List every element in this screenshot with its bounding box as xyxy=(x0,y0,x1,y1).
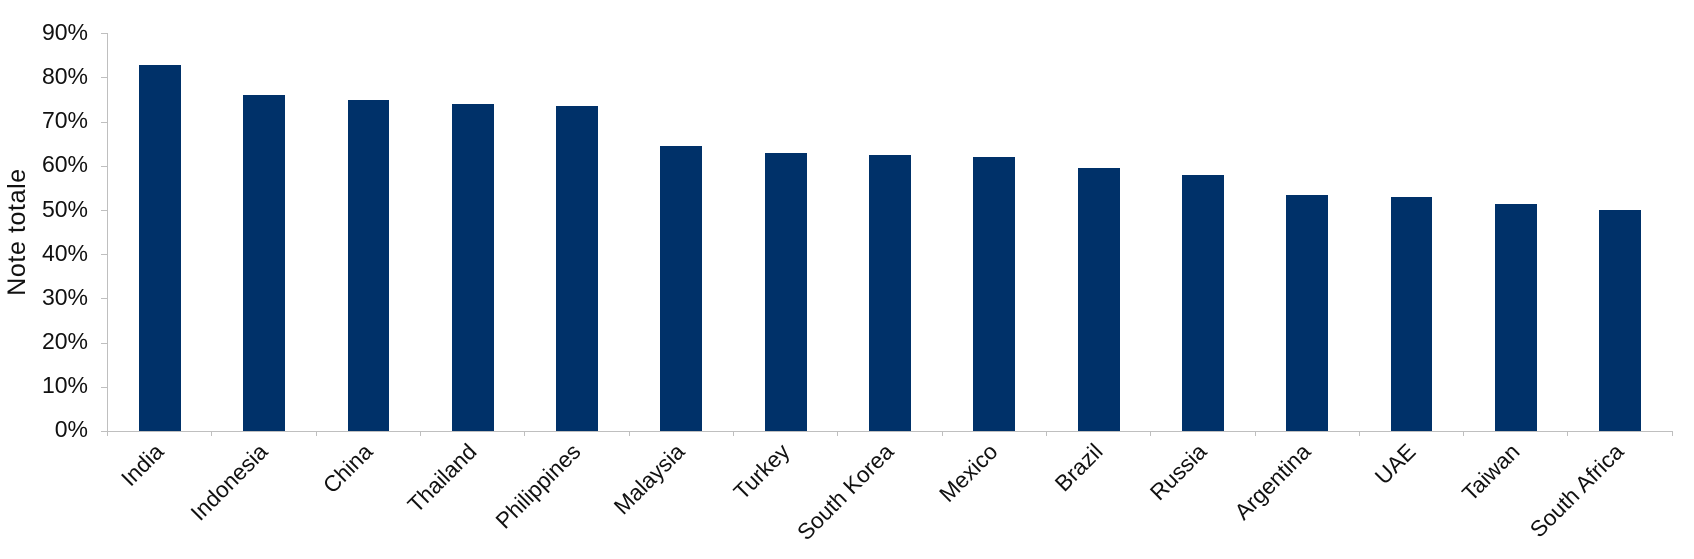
x axis country labels: South Africa xyxy=(1525,439,1629,542)
x axis country labels: UAE xyxy=(1370,439,1421,489)
y axis labels: 70% xyxy=(42,107,88,133)
y axis labels xyxy=(42,19,88,442)
x axis country labels: Brazil xyxy=(1050,439,1108,496)
y axis labels: 50% xyxy=(42,196,88,222)
x axis country labels: China xyxy=(318,439,378,498)
x axis country labels xyxy=(116,438,1629,545)
y axis labels: 10% xyxy=(42,372,88,398)
x axis country labels: Russia xyxy=(1145,439,1212,505)
x axis country labels: India xyxy=(116,439,169,491)
x axis country labels: Indonesia xyxy=(186,439,273,526)
y axis labels: 90% xyxy=(42,19,88,45)
x axis country labels: Argentina xyxy=(1230,439,1316,525)
y axis title: Note totale xyxy=(3,168,31,296)
x axis country labels: South Korea xyxy=(792,439,899,545)
bars xyxy=(139,65,1641,431)
x axis country labels: Malaysia xyxy=(609,439,690,519)
x axis country labels: Mexico xyxy=(934,439,1003,507)
y axis labels: 0% xyxy=(55,416,88,442)
y axis labels: 60% xyxy=(42,151,88,177)
x axis country labels: Turkey xyxy=(729,438,795,505)
axes and tick marks xyxy=(101,33,1672,436)
x axis country labels: Taiwan xyxy=(1457,439,1525,506)
y axis labels: 20% xyxy=(42,328,88,354)
y axis labels: 80% xyxy=(42,63,88,89)
y axis labels: 40% xyxy=(42,240,88,266)
x axis country labels: Philippines xyxy=(491,439,586,533)
y axis labels: 30% xyxy=(42,284,88,310)
x axis country labels: Thailand xyxy=(403,439,482,518)
